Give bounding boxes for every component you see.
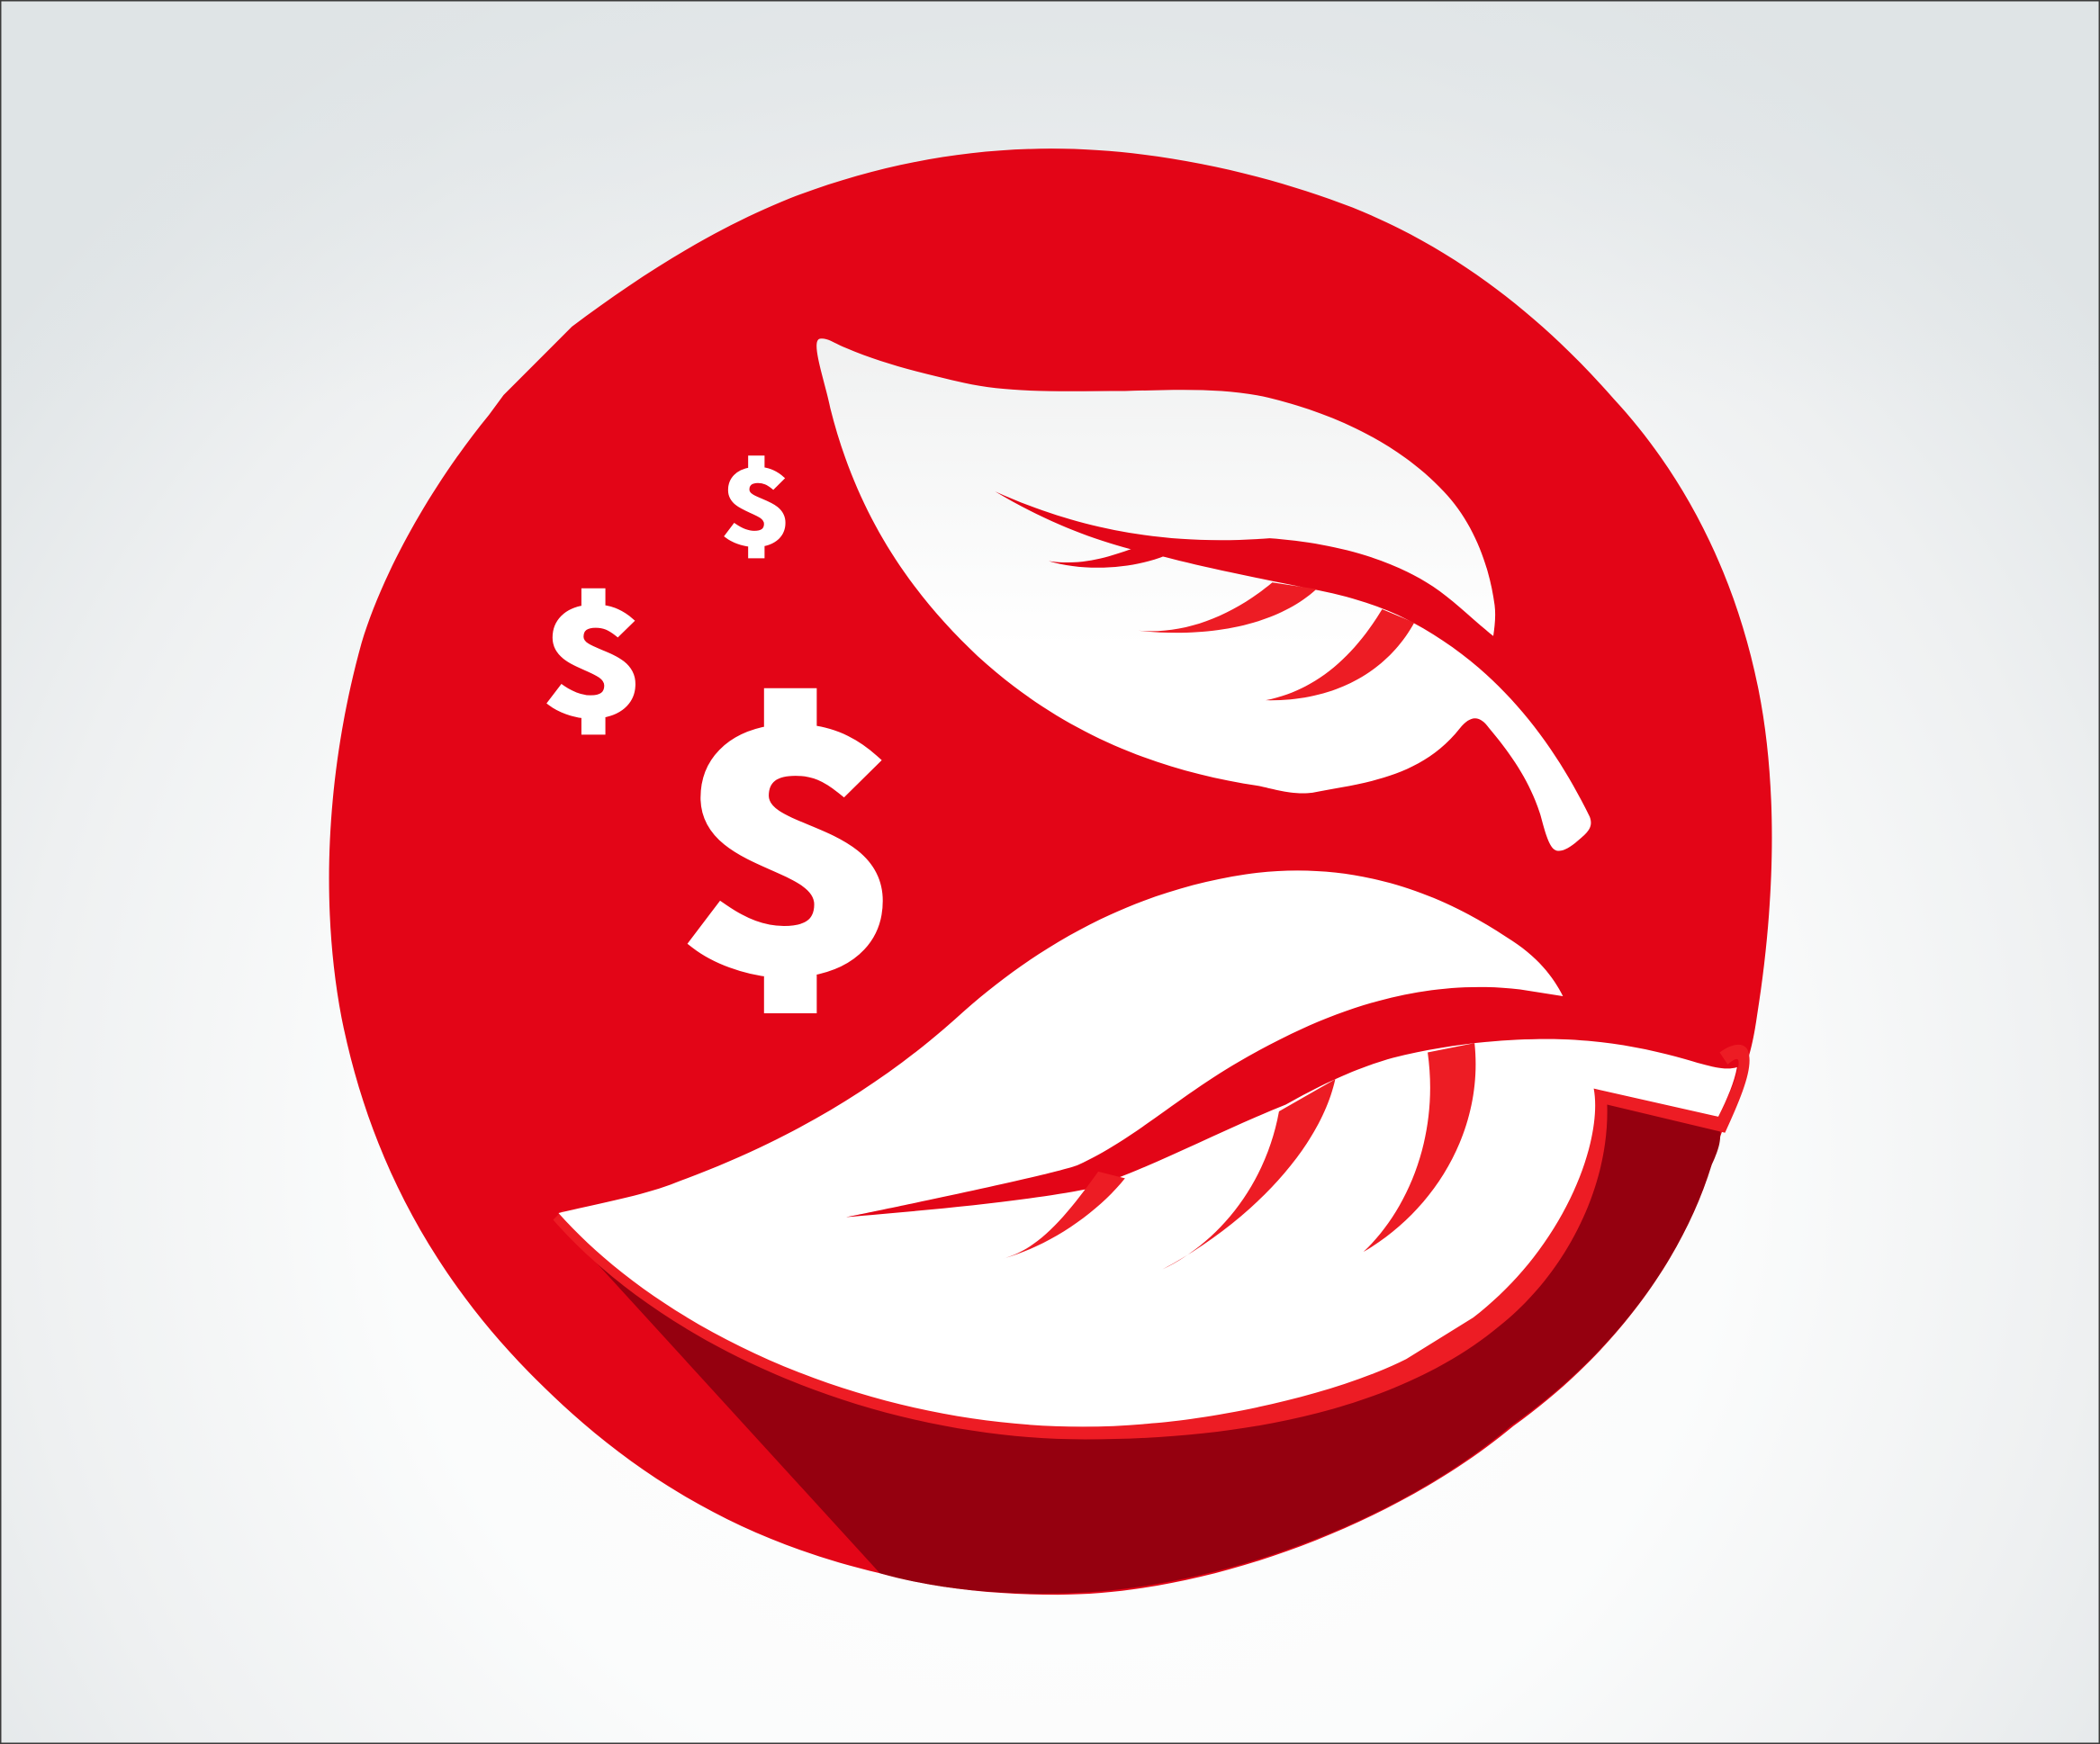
long shadow of lower leaf bbox=[571, 1098, 1720, 1594]
small dollar sign: $ bbox=[721, 427, 791, 573]
lower leaf vein: right feather bbox=[1364, 1043, 1475, 1252]
lower leaf outline band bbox=[553, 1045, 1750, 1439]
medium dollar sign: $ bbox=[543, 546, 644, 756]
upper leaf vein: lower feather bbox=[1266, 609, 1414, 700]
upper leaf vein: middle feather bbox=[1139, 582, 1317, 633]
red circular badge bbox=[329, 148, 1771, 1595]
upper leaf bbox=[816, 338, 1591, 851]
background top shading bbox=[1, 2, 2099, 403]
large dollar sign: $ bbox=[680, 594, 901, 1059]
upper leaf vein: small feather bbox=[1049, 548, 1165, 568]
lower leaf vein: left feather bbox=[1003, 1172, 1125, 1259]
lower leaf bbox=[558, 870, 1737, 1426]
lower leaf vein: middle feather bbox=[1162, 1079, 1335, 1270]
